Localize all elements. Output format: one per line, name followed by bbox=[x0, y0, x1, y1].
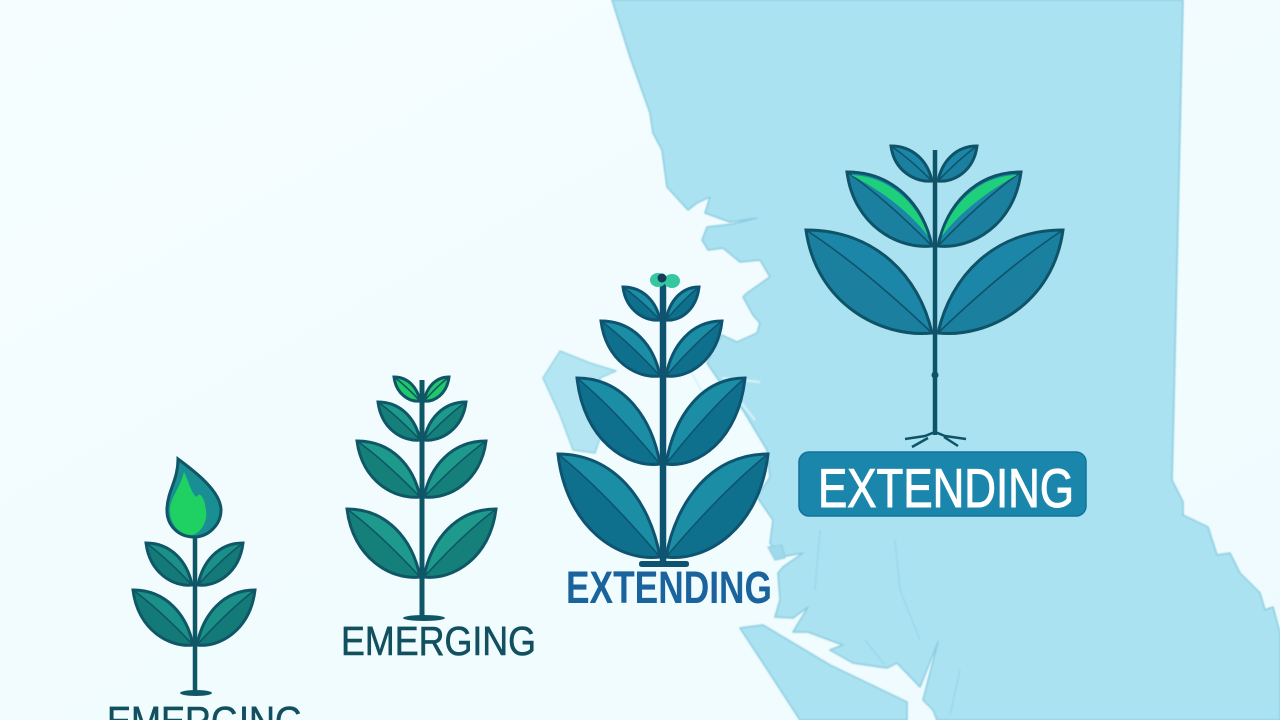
large leaves bbox=[806, 230, 1063, 334]
base bbox=[180, 690, 212, 696]
plant 4: extending mature bbox=[806, 146, 1063, 447]
channel strip bbox=[690, 370, 760, 420]
label: extending dark: EXTENDING bbox=[566, 562, 772, 613]
stem node bbox=[932, 372, 938, 378]
western island bbox=[543, 351, 616, 453]
lower leaves bbox=[133, 590, 255, 645]
top leaves bbox=[891, 146, 977, 181]
upper middle leaves bbox=[601, 321, 722, 376]
stem bbox=[420, 380, 424, 618]
rivers bbox=[815, 530, 960, 715]
base bbox=[639, 561, 689, 567]
label: extending badge bbox=[799, 452, 1086, 519]
badge background bbox=[799, 452, 1086, 516]
stem bbox=[193, 536, 197, 692]
bottom leaves bbox=[558, 454, 768, 558]
middle leaves bbox=[357, 441, 486, 497]
small islet bbox=[768, 545, 785, 560]
plant 3: extending tall bbox=[558, 273, 768, 567]
stem bbox=[933, 150, 937, 435]
top green bud bbox=[650, 273, 680, 288]
top leaves bbox=[623, 287, 699, 320]
top green leaves bbox=[394, 377, 449, 401]
plant 2: emerging sapling bbox=[347, 377, 496, 621]
base bbox=[403, 615, 445, 621]
label: emerging 2: EMERGING bbox=[341, 618, 536, 664]
upper leaves bbox=[146, 543, 243, 585]
stem bbox=[660, 282, 666, 563]
badge text: EXTENDING bbox=[818, 457, 1074, 519]
bottom leaves bbox=[347, 509, 496, 577]
map of coastline bbox=[543, 0, 1280, 720]
upper leaves bbox=[378, 402, 466, 440]
roots bbox=[905, 432, 966, 447]
middle leaves with green highlight bbox=[847, 172, 1021, 246]
lower middle leaves bbox=[577, 378, 745, 464]
green bud bbox=[167, 459, 221, 537]
mainland bbox=[612, 0, 1280, 720]
plant 1: emerging seedling bbox=[133, 459, 255, 696]
southern island bbox=[740, 625, 907, 720]
